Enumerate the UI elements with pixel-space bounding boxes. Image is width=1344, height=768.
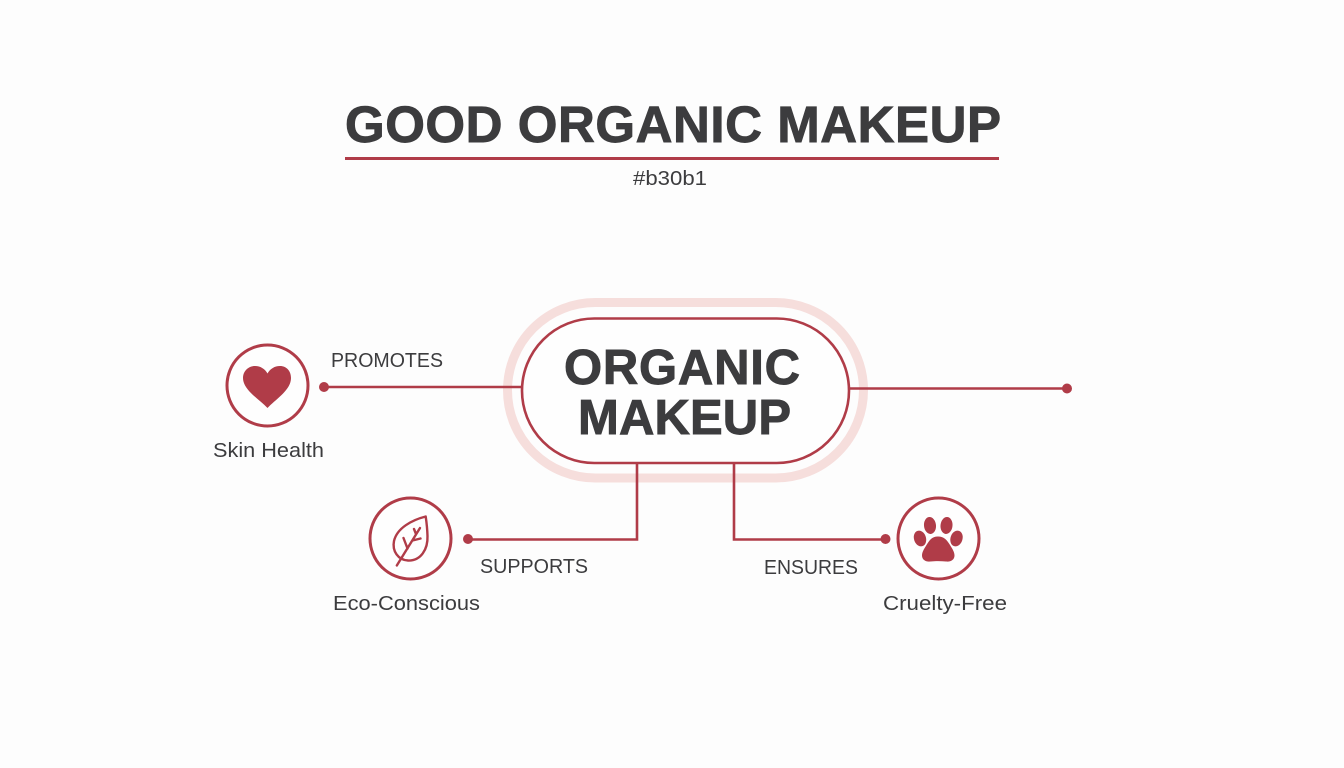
connector: ensures xyxy=(734,463,890,544)
relation label: promotes: PROMOTES xyxy=(331,350,443,372)
relation label: supports: SUPPORTS xyxy=(480,556,588,578)
connector: promotes xyxy=(319,382,522,392)
central node xyxy=(522,318,849,463)
relation label: ensures: ENSURES xyxy=(764,557,858,579)
icon: paw xyxy=(898,498,979,579)
label: skin health: Skin Health xyxy=(213,439,324,462)
icon: leaf xyxy=(370,498,451,579)
label: eco-conscious: Eco-Conscious xyxy=(333,592,480,615)
title: GOOD ORGANIC MAKEUP xyxy=(345,96,1001,153)
inner pill xyxy=(522,318,849,463)
title block xyxy=(345,96,1001,190)
subtitle: #b30b1 xyxy=(633,167,707,190)
icon: heart xyxy=(227,345,308,426)
node: skin health xyxy=(213,345,324,462)
central label: MAKEUP xyxy=(578,391,791,445)
central node halo ring xyxy=(508,302,864,478)
central label xyxy=(564,341,800,445)
connector: supports xyxy=(463,463,637,544)
title underline xyxy=(345,157,999,160)
node: eco-conscious xyxy=(333,498,480,615)
central label: ORGANIC xyxy=(564,341,800,395)
node: cruelty-free xyxy=(883,498,1007,615)
label: cruelty-free: Cruelty-Free xyxy=(883,592,1007,615)
connector: right empty branch xyxy=(849,384,1072,394)
